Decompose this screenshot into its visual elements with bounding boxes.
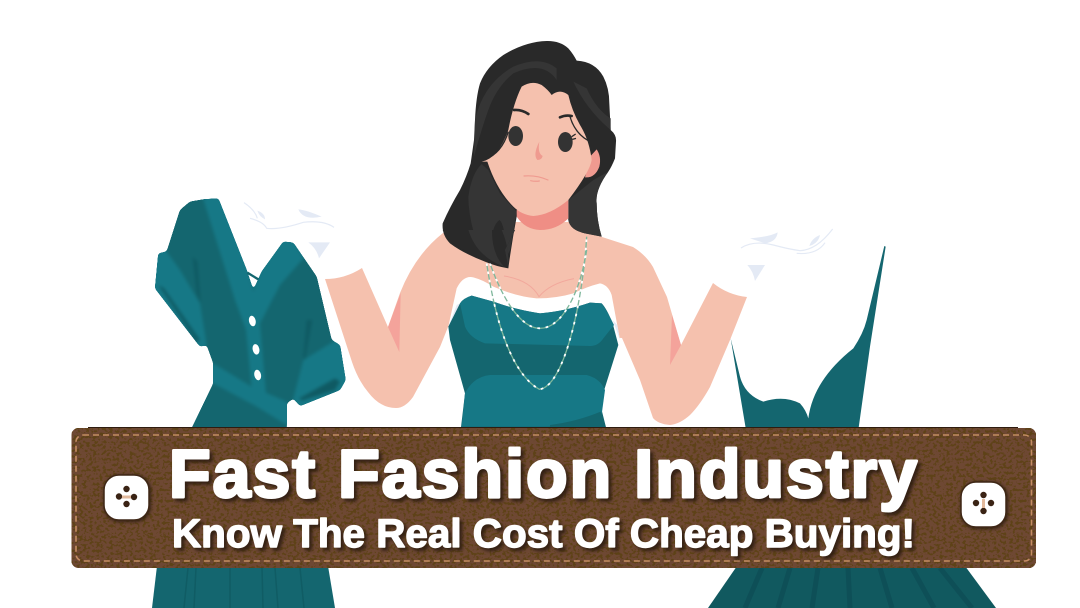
left dress [155,198,346,432]
strapless dress [443,230,620,430]
left dress sleeve folds [158,257,340,401]
nose [535,142,543,160]
right button [961,482,1006,527]
dress lower panel [462,375,605,427]
left skirt pleats [184,568,304,608]
left dress sleeve left [155,252,207,347]
left dress placket and collar [203,198,303,394]
inner necklace [490,250,587,328]
left arm crease [388,293,401,352]
dress upper panel [460,296,614,346]
right glove fold marks [747,232,820,281]
left glove fold marks [257,209,330,258]
right arm crease [670,315,681,365]
outer necklace [487,237,587,389]
chest lines [504,276,574,297]
left skirt shape [152,566,335,608]
left button body [104,475,149,520]
dress dark base [448,296,618,430]
right skirt shape [708,566,996,608]
eyes [508,126,573,152]
right skirt pleats [745,568,972,608]
left glove finger lines [244,203,334,229]
neck shadow [517,199,568,230]
left dress belt [213,363,287,425]
left dress sleeve right [293,342,346,406]
right button body [961,482,1006,527]
ear [585,149,600,177]
woman figure [244,41,833,430]
left button [104,475,149,520]
eyelashes and hair strands [485,117,588,159]
dress hem shadow [550,412,607,430]
hair lock over chest [443,230,515,267]
right dress [731,246,886,430]
left button thread [122,496,131,498]
band shadow edges [448,303,620,340]
title: Fast Fashion Industry [169,436,917,512]
face [482,83,592,216]
outer necklace beads [487,237,587,389]
left dress skirt below banner [152,566,335,608]
right glove details [741,229,833,281]
right button holes [973,492,994,514]
eyebrows [514,110,572,117]
hair back [443,41,616,268]
left dress buttons [248,315,262,381]
right glove finger lines [741,229,833,254]
arms and torso skin [325,222,747,425]
left dress garment [155,198,346,432]
left glove details [244,203,334,258]
inner necklace beads [490,250,587,328]
banner leather background [72,428,1036,568]
mouth [524,176,548,181]
hair lock highlights [468,230,515,267]
left button holes [116,486,137,507]
subtitle: Know The Real Cost Of Cheap Buying! [172,512,915,556]
right dress skirt below banner [708,566,996,608]
left dress inner strap [247,273,258,279]
leather banner [72,427,1036,568]
head [443,41,616,268]
white neckline band [448,277,620,340]
banner dark top edge [88,427,1018,430]
left dress body [155,198,346,432]
banner stitching [76,435,1032,561]
right button thread [982,499,985,508]
hair highlights [468,61,611,262]
